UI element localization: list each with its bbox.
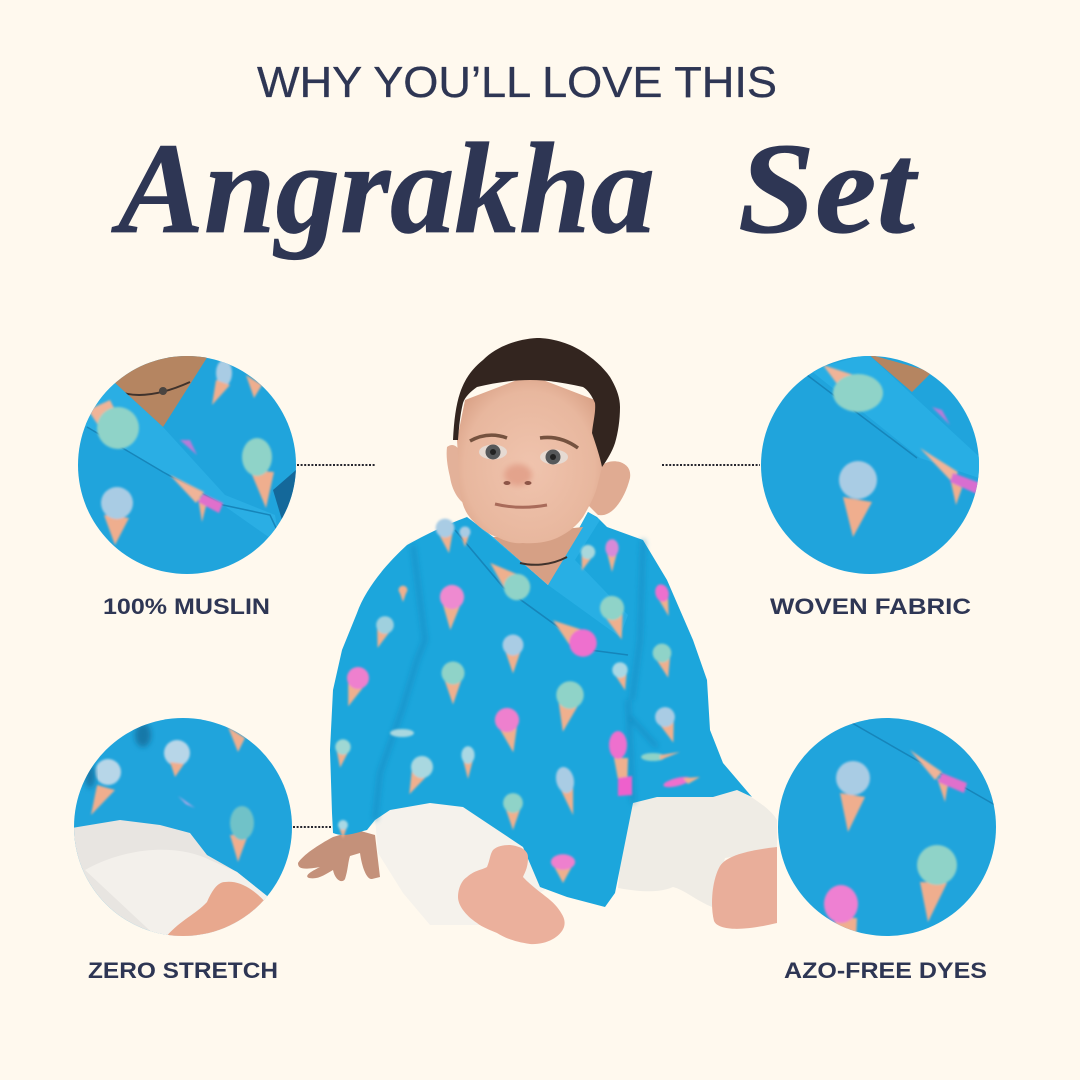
- detail circle: azo-free dyes: [776, 716, 998, 940]
- foot: [168, 882, 264, 936]
- right eye: [540, 450, 568, 464]
- label: 100% muslin: 100% MUSLIN: [103, 594, 270, 619]
- right foot: [712, 847, 777, 929]
- collar edge line: [455, 530, 628, 655]
- left hand: [298, 830, 380, 881]
- label: woven fabric: WOVEN FABRIC: [770, 594, 971, 619]
- neck skin: [870, 356, 930, 392]
- shirt collar: [467, 512, 628, 637]
- front foot: [458, 845, 565, 944]
- mouth: [495, 504, 547, 507]
- detail circle: 100% muslin: [76, 350, 298, 576]
- neck skin: [115, 350, 208, 427]
- connector: zero stretch: [293, 826, 331, 828]
- label: azo-free dyes: AZO-FREE DYES: [784, 958, 987, 983]
- label: zero stretch: ZERO STRETCH: [88, 958, 278, 983]
- left eyebrow: [470, 435, 507, 441]
- detail circle: zero stretch: [72, 716, 294, 945]
- face: [457, 375, 602, 543]
- shirt shading: [375, 540, 657, 820]
- neck: [493, 527, 583, 585]
- ice cream pattern: [332, 517, 700, 883]
- right eyebrow: [540, 437, 578, 448]
- title: Angrakha Set: [111, 117, 919, 261]
- right leg trousers: [618, 788, 777, 907]
- hair: [453, 338, 620, 467]
- detail circle: woven fabric: [759, 354, 985, 576]
- title: Angrakha Set: Set: [738, 117, 919, 261]
- right ear: [588, 461, 630, 515]
- nose: [504, 464, 532, 486]
- connector: woven: [662, 464, 760, 466]
- shirt silhouette: [330, 512, 752, 907]
- left ear: [446, 445, 462, 502]
- trousers: [72, 820, 272, 940]
- baby photo illustration: [298, 338, 777, 944]
- necklace: [520, 557, 567, 565]
- heading: why you'll love this: WHY YOU’LL LOVE THIS: [257, 58, 777, 107]
- title: Angrakha Set: Angrakha: [111, 117, 655, 261]
- left eye: [479, 444, 507, 460]
- collar band: [78, 383, 280, 545]
- connector: muslin: [297, 464, 375, 466]
- collar band: [810, 354, 985, 480]
- left leg trousers: [375, 800, 545, 925]
